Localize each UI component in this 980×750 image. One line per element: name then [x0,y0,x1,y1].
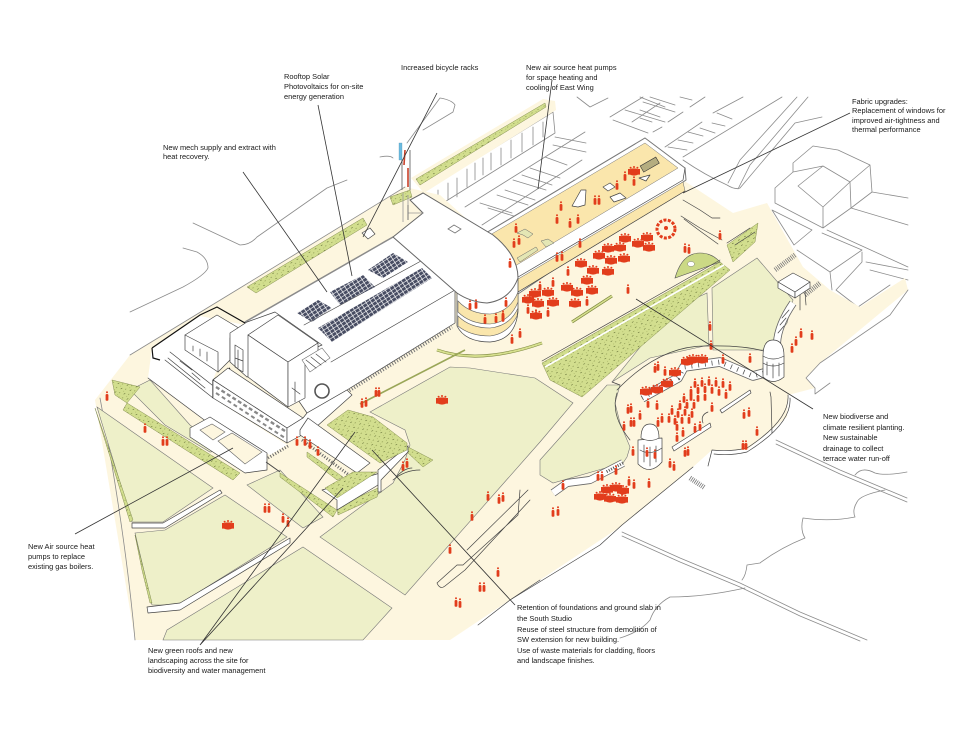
callout: rooftop solar [284,72,363,101]
callout: fabric upgrades [852,97,946,134]
site ground: cream paving [95,180,908,640]
east wing with roof terrace [486,138,686,294]
callout: biodiverse planting and drainage [823,412,904,463]
bicycle racks mast [362,143,410,239]
leader: air source heat pumps [75,448,233,534]
callout: green roofs: landscaping across the site for [148,656,249,665]
callout: biodiverse planting and drainage: New biodiverse and [823,412,888,421]
callout: mech supply and extract [163,143,276,161]
callout: mech supply and extract: heat recovery. [163,152,210,161]
callout: retention and reuse: Retention of foundations and ground slab in [517,603,661,612]
leader: bicycle racks [363,93,437,237]
callout: retention and reuse: Use of waste materials for cladding, floors [517,646,655,655]
callout: retention and reuse: the South Studio [517,614,572,623]
callout: mech supply and extract: New mech supply and extract with [163,143,276,152]
callout: biodiverse planting and drainage: terrace water run-off [823,454,891,463]
leader: retention of structure [372,450,515,605]
facade colonnade [347,327,452,392]
pavilion: right dome [763,356,784,382]
people on roof terrace and plaza [469,166,721,344]
callout: rooftop solar: Rooftop Solar [284,72,330,81]
context linework: roads and parking [130,97,822,312]
callout: rooftop solar: Photovoltaics for on-site [284,82,363,91]
context: neighbouring buildings north-east [772,146,908,307]
leader: east wing heat pumps [538,80,552,189]
callout: biodiverse planting and drainage: drainage to collect [823,444,884,453]
terrace: balustrades, pavilions and benches [553,200,820,493]
callout: green roofs [148,646,266,675]
callout: bicycle racks: Increased bicycle racks [401,63,479,72]
circular window [315,384,329,398]
lawns [97,258,793,640]
context: roads south-east [620,440,907,641]
rotunda and north block roof [393,193,518,342]
callout: green roofs: New green roofs and new [148,646,233,655]
callout: east wing heat pumps: New air source heat pumps [526,63,617,72]
callout: retention and reuse: SW extension for new building. [517,635,619,644]
callout: fabric upgrades: Fabric upgrades: [852,97,908,106]
callout: east wing heat pumps [526,63,617,92]
air source heat pump compound [190,417,288,473]
south studio with green roofs [300,410,420,510]
callout: air source heat pumps: existing gas boilers. [28,562,93,571]
callout: fabric upgrades: improved air-tightness and [852,116,940,125]
callout: air source heat pumps: New Air source heat [28,542,95,551]
kiosk [778,273,810,292]
callout: rooftop solar: energy generation [284,92,344,101]
callout: retention and reuse: Reuse of steel structure from demolition of [517,625,658,634]
west blocks: annex, fly tower and front block [148,307,352,455]
callout: fabric upgrades: Replacement of windows for [852,106,946,115]
bench and planter rows [672,390,751,451]
callout: retention and reuse: and landscape finishes. [517,656,595,665]
people on the terrace lawn and steps [552,321,813,517]
solar-ready main roof and building mass [245,237,463,413]
callout: east wing heat pumps: for space heating and [526,73,598,82]
callout: biodiverse planting and drainage: climate resilient planting. [823,423,904,432]
callout: air source heat pumps [28,542,95,571]
callout: east wing heat pumps: cooling of East Wing [526,83,594,92]
solar panels [297,253,432,342]
people on the south lawns and paths [106,387,504,608]
leader: biodiverse planting [636,299,813,409]
leader: rooftop solar [318,105,352,276]
callout: fabric upgrades: thermal performance [852,125,921,134]
callout: air source heat pumps: pumps to replace [28,552,85,561]
callout: retention and reuse [517,603,661,665]
pavilion: left dome [638,438,662,470]
callout: biodiverse planting and drainage: New sustainable [823,433,878,442]
planting: biodiverse strip east of terrace [542,223,758,397]
leader: mech supply [243,172,327,292]
callout: green roofs: biodiversity and water management [148,666,266,675]
small steps and stair [690,255,820,488]
retaining walls and ramps [132,490,540,625]
planting: hedges [95,103,612,603]
leader: fabric upgrades [683,113,850,193]
leader: green roofs [200,432,355,645]
